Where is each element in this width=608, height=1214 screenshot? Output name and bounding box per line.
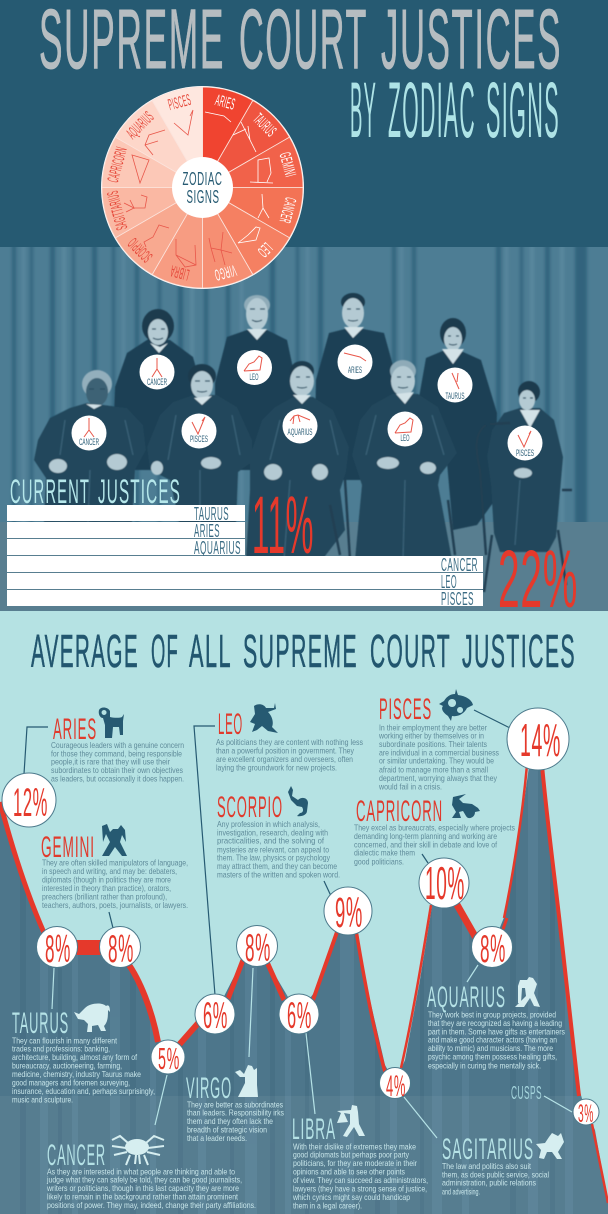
icon: scales [337, 1105, 365, 1137]
justice badge: pisces: PISCES [516, 448, 534, 458]
justice badge: cancer [140, 354, 174, 390]
block: virgo: than leaders. Responsibility irks [187, 1108, 284, 1118]
justice badge: cancer: CANCER [147, 377, 167, 387]
wheel sign labels: TAURUS [250, 111, 279, 140]
subtitle [350, 65, 560, 154]
block: libra: which cynics might say could handicap [292, 1192, 410, 1202]
text: CUSPS [511, 1083, 542, 1103]
wheel sign labels: LIBRA [168, 261, 191, 283]
hands [49, 454, 532, 480]
block: libra: lawyers (they have a strong sense of justice, [293, 1183, 427, 1193]
block: scorpio: SCORPIO [217, 791, 283, 824]
wheel center [172, 157, 233, 218]
seated robes [34, 394, 563, 560]
block: gemini: diplomats (though in politics they are more [42, 874, 171, 884]
icon: ram [99, 707, 124, 738]
block: libra [292, 1113, 428, 1210]
block: leo: are excellent organizers and overseers, often [216, 754, 353, 764]
block: aquarius: that they are recognized as having a leading [428, 1018, 562, 1028]
marker: scorpio 9 percent [324, 887, 372, 937]
block: scorpio: investigation, research, dealing with [217, 827, 328, 837]
block: cancer: writers or politicians, though in this last capacity they are more [46, 1183, 239, 1193]
marker: taurus 8 percent [36, 926, 78, 971]
wheel center: ZODIAC [182, 169, 222, 189]
justice badge: leo [388, 412, 422, 446]
block: libra: good diplomats but perhaps poor party [293, 1150, 410, 1160]
block: sagittarius [442, 1133, 549, 1196]
block: cancer: likely to remain in the background rather than attain prominent [47, 1191, 239, 1201]
marker: virgo 8 percent: 8% [245, 927, 271, 970]
block: virgo: that a leader needs. [187, 1133, 247, 1143]
block: gemini: in speech and writing, and may be: debaters, [42, 866, 177, 876]
wheel sign labels: CAPRICORN [105, 145, 131, 184]
justice badge: aries: ARIES [348, 365, 362, 375]
block: capricorn: good politicians. [354, 856, 404, 866]
block: capricorn: dialectic make them [354, 848, 415, 858]
block: taurus: architecture, building, almost any form of [12, 1052, 138, 1062]
marker: aries 12 percent [2, 773, 56, 827]
block: capricorn: concerned, and their skill in debate and love of [354, 839, 498, 849]
block: taurus: insurance, education and, perhaps surprisingly, [12, 1086, 155, 1096]
block: gemini: interested in theory than practice), orators, [42, 883, 171, 893]
bar group: 22 percent: LEO [441, 572, 457, 592]
block: pisces: department, worrying always that they [379, 773, 498, 783]
collars [86, 327, 540, 428]
marker: scorpio 9 percent: 9% [335, 889, 363, 937]
wheel center: SIGNS [186, 187, 220, 207]
block: aquarius: AQUARIUS [427, 981, 506, 1014]
justice badge: cancer [72, 416, 106, 450]
marker: libra 6 percent: 6% [287, 995, 312, 1036]
block: taurus: trades and professions: banking, [12, 1044, 110, 1054]
block: sagittarius: them, as does public service, social [442, 1169, 549, 1179]
block: taurus [12, 1007, 155, 1104]
red trend line [0, 765, 608, 1203]
justice badge: taurus [438, 368, 472, 402]
justice badge: leo [237, 350, 272, 385]
block: taurus: good managers and foremen surveying, [12, 1078, 130, 1088]
block: libra: LIBRA [292, 1113, 336, 1146]
block: capricorn: demanding long-term planning and working are [354, 831, 497, 841]
marker: gemini 8 percent: 8% [108, 928, 134, 971]
block: libra: them in a legal career). [293, 1200, 362, 1210]
block: pisces: working either by themselves or in [378, 731, 484, 741]
justice badge: cancer: CANCER [79, 437, 99, 447]
marker: taurus 8 percent: 8% [45, 928, 71, 971]
block: scorpio: masters of the written and spoken word. [217, 869, 340, 879]
heading: average of all: ALL [189, 625, 232, 677]
block: pisces: would fail in a crisis. [378, 781, 442, 791]
block: aries: as leaders, but occasionally it does happen. [51, 773, 184, 783]
block: pisces: PISCES [379, 693, 432, 726]
text: JUSTICES [98, 473, 181, 511]
block: gemini: They are often skilled manipulators of language, [42, 858, 188, 868]
justice badge: pisces [182, 414, 216, 448]
block: virgo: them and they often lack the [187, 1116, 273, 1126]
block: taurus: medicine, chemistry, industry Taurus make [12, 1069, 141, 1079]
wheel sign labels: PISCES [167, 92, 193, 114]
header background [0, 0, 608, 247]
back row robes [112, 327, 497, 530]
block: taurus: bureaucracy, auctioneering, farming, [12, 1061, 122, 1071]
subtitle: BY [350, 65, 377, 154]
block: pisces: subordinate positions. Their talents [379, 739, 487, 749]
block: aquarius: They work best in group projects, provided [428, 1009, 556, 1019]
area chart [0, 768, 608, 1214]
block: scorpio: may attract them, and they can become [217, 861, 337, 871]
bar group: 11 percent [7, 504, 245, 558]
marker: sagittarius 4 percent: 4% [386, 1070, 406, 1103]
icon: fish [439, 689, 473, 721]
block: cancer: judge what they can safely be told, they can be good journalists, [46, 1175, 242, 1185]
icon: bull [74, 1004, 110, 1032]
icon: lion [250, 703, 278, 733]
text: 10% [425, 857, 465, 909]
block: aquarius: especially in curing the mentally sick. [428, 1060, 541, 1070]
block: aries: for those they command, being responsible [51, 748, 182, 758]
block: sagittarius: The law and politics also suit [442, 1161, 532, 1171]
bar chart: current justices: AQUARIUS [194, 538, 241, 558]
wheel sign labels: AQUARIUS [124, 109, 158, 143]
justice badge: aquarius: AQUARIUS [288, 427, 312, 437]
block: gemini: GEMINI [41, 831, 95, 864]
icon: maiden [235, 1065, 258, 1097]
block: gemini [41, 831, 188, 910]
icon: scorpion [288, 786, 308, 816]
block: aries: ARIES [53, 713, 97, 746]
block: pisces: or similar undertaking. They would be [379, 756, 494, 766]
marker: aquarius 8 percent: 8% [480, 928, 506, 971]
block: sagittarius: and advertising. [442, 1186, 480, 1196]
block: pisces: are individual in a commercial business [379, 747, 499, 757]
wheel sign labels: VIRGO [212, 261, 238, 283]
lower section background [0, 611, 608, 1214]
wheel sign labels: CANCER [275, 195, 299, 225]
block: libra: of view. They can succeed as administrators, [293, 1175, 428, 1185]
block: libra: politicians, for they are moderate in their [293, 1158, 417, 1168]
wheel sign labels: ARIES [213, 92, 237, 114]
block: virgo: VIRGO [186, 1072, 232, 1105]
block: gemini: preachers (brilliant rather than profound), [42, 891, 167, 901]
justice badge: aries [338, 344, 372, 380]
block: sagittarius: administration, public relations [442, 1178, 536, 1188]
block: libra: With their dislike of extremes they make [293, 1141, 416, 1151]
marker: sagittarius 4 percent [380, 1068, 410, 1103]
marker: leo 6 percent: 6% [203, 995, 228, 1036]
heading: current justices: CURRENT [10, 473, 90, 511]
block: aries: Courageous leaders with a genuine concern [51, 740, 184, 750]
block: taurus: TAURUS [12, 1007, 69, 1040]
connector lines [24, 710, 572, 1138]
block: aries [51, 713, 184, 783]
icon: water bearer [515, 977, 540, 1007]
eyes and mouths [89, 309, 533, 398]
block: scorpio [217, 791, 340, 879]
block: leo: LEO [218, 708, 243, 741]
heading: average of all: SUPREME [243, 625, 358, 677]
block: scorpio: mysteries are relevant, can appeal to [217, 844, 329, 854]
block: capricorn [354, 795, 515, 866]
zodiac wheel [101, 86, 304, 289]
robe folds and legs [60, 415, 520, 560]
bar group: 11 percent: TAURUS [194, 504, 229, 524]
block: gemini: teachers, authors, poets, journalists, or lawyers. [42, 900, 188, 910]
block: cancer: CANCER [47, 1139, 106, 1172]
justice badge: taurus: TAURUS [446, 391, 464, 401]
block: cancer [46, 1139, 256, 1210]
block: virgo [186, 1072, 284, 1143]
justices photograph [0, 240, 608, 612]
marker: cancer 5 percent: 5% [158, 1041, 180, 1076]
block: leo [216, 708, 363, 772]
block: aquarius [427, 981, 565, 1070]
heading: average of all: COURT [370, 625, 451, 677]
block: capricorn: They excel as bureaucrats, especially where projects [354, 822, 515, 832]
wheel sign labels: GEMINI [276, 151, 298, 179]
icon: twins [102, 824, 127, 856]
heading: average of all [31, 625, 576, 677]
bar group: 22 percent [7, 555, 483, 609]
chair [330, 423, 572, 592]
heading: average of all: OF [151, 625, 179, 677]
block: scorpio: Any profession in which analysis, [217, 819, 320, 829]
icon: crab [112, 1136, 164, 1165]
marker: capricorn 10 percent [419, 857, 469, 909]
faces [148, 298, 535, 410]
justice badge: pisces [508, 426, 542, 460]
block: cancer: As they are interested in what people are thinking and able to [47, 1166, 235, 1176]
block: aquarius: and make good character actors (having an [428, 1035, 557, 1045]
marker: libra 6 percent [279, 994, 319, 1036]
marker: virgo 8 percent [236, 926, 278, 970]
block: aquarius: psychic among them possess healing gifts, [428, 1052, 557, 1062]
heading: average of all: AVERAGE [31, 625, 139, 677]
bar chart: current justices [7, 504, 483, 609]
marker: cusps 3 percent [573, 1099, 599, 1128]
marker: pisces 14 percent [507, 708, 569, 770]
wheel sign labels [105, 92, 299, 283]
justice badge: leo: LEO [250, 372, 258, 382]
block: aries: subordinates to obtain their own objectives [51, 765, 183, 775]
bar group: 22 percent: PISCES [441, 589, 474, 609]
bar group: 11 percent: ARIES [194, 521, 220, 541]
block: aquarius: part in them. Some have gifts as entertainers [428, 1026, 565, 1036]
bar group: 22 percent: CANCER [441, 555, 478, 575]
icon: sea goat [452, 794, 480, 818]
marker: leo 6 percent [195, 994, 235, 1036]
block: pisces: In their employment they are better [379, 722, 487, 732]
block: taurus: They can flourish in many different [12, 1035, 118, 1045]
justice badge: pisces: PISCES [190, 434, 208, 444]
block: aries: people,it is rare that they will use their [51, 757, 170, 767]
wheel constellations [124, 110, 273, 267]
hair [142, 293, 540, 403]
floor [0, 522, 608, 612]
text: 11% [252, 480, 314, 571]
block: leo: As politicians they are content with nothing less [216, 737, 363, 747]
block: pisces: afraid to manage more than a small [379, 764, 488, 774]
marker: aries 12 percent: 12% [13, 781, 48, 825]
block: pisces [378, 693, 499, 791]
block: libra: opinions and able to see other points [293, 1167, 405, 1177]
block: scorpio: practicalities, and the solving of [217, 836, 325, 846]
marker: gemini 8 percent [100, 926, 140, 971]
block: capricorn: CAPRICORN [356, 795, 443, 828]
marker: aquarius 8 percent [472, 926, 512, 971]
block: taurus: music and sculpture. [12, 1094, 73, 1104]
block: cancer: positions of power. They may, indeed, change their party affiliations. [47, 1200, 256, 1210]
block: leo: laying the groundwork for new projects. [216, 762, 337, 772]
wheel sign labels: SCORPIO [125, 234, 156, 265]
block: scorpio: them. The law, physics or psychology [217, 853, 331, 863]
icon: archer [536, 1133, 564, 1159]
wheel sign labels: LEO [254, 239, 275, 260]
justice badge: aquarius [282, 408, 318, 444]
block: aquarius: ability to mimic) and musicians. The more [428, 1043, 553, 1053]
block: virgo: They are better as subordinates [187, 1099, 283, 1109]
block: leo: than a powerful position in government. They [216, 745, 355, 755]
block: virgo: breadth of strategic vision [187, 1125, 267, 1135]
marker: cancer 5 percent [151, 1040, 185, 1076]
wheel sign labels: SAGITTARIUS [105, 189, 131, 232]
justice badge: leo: LEO [400, 433, 410, 443]
